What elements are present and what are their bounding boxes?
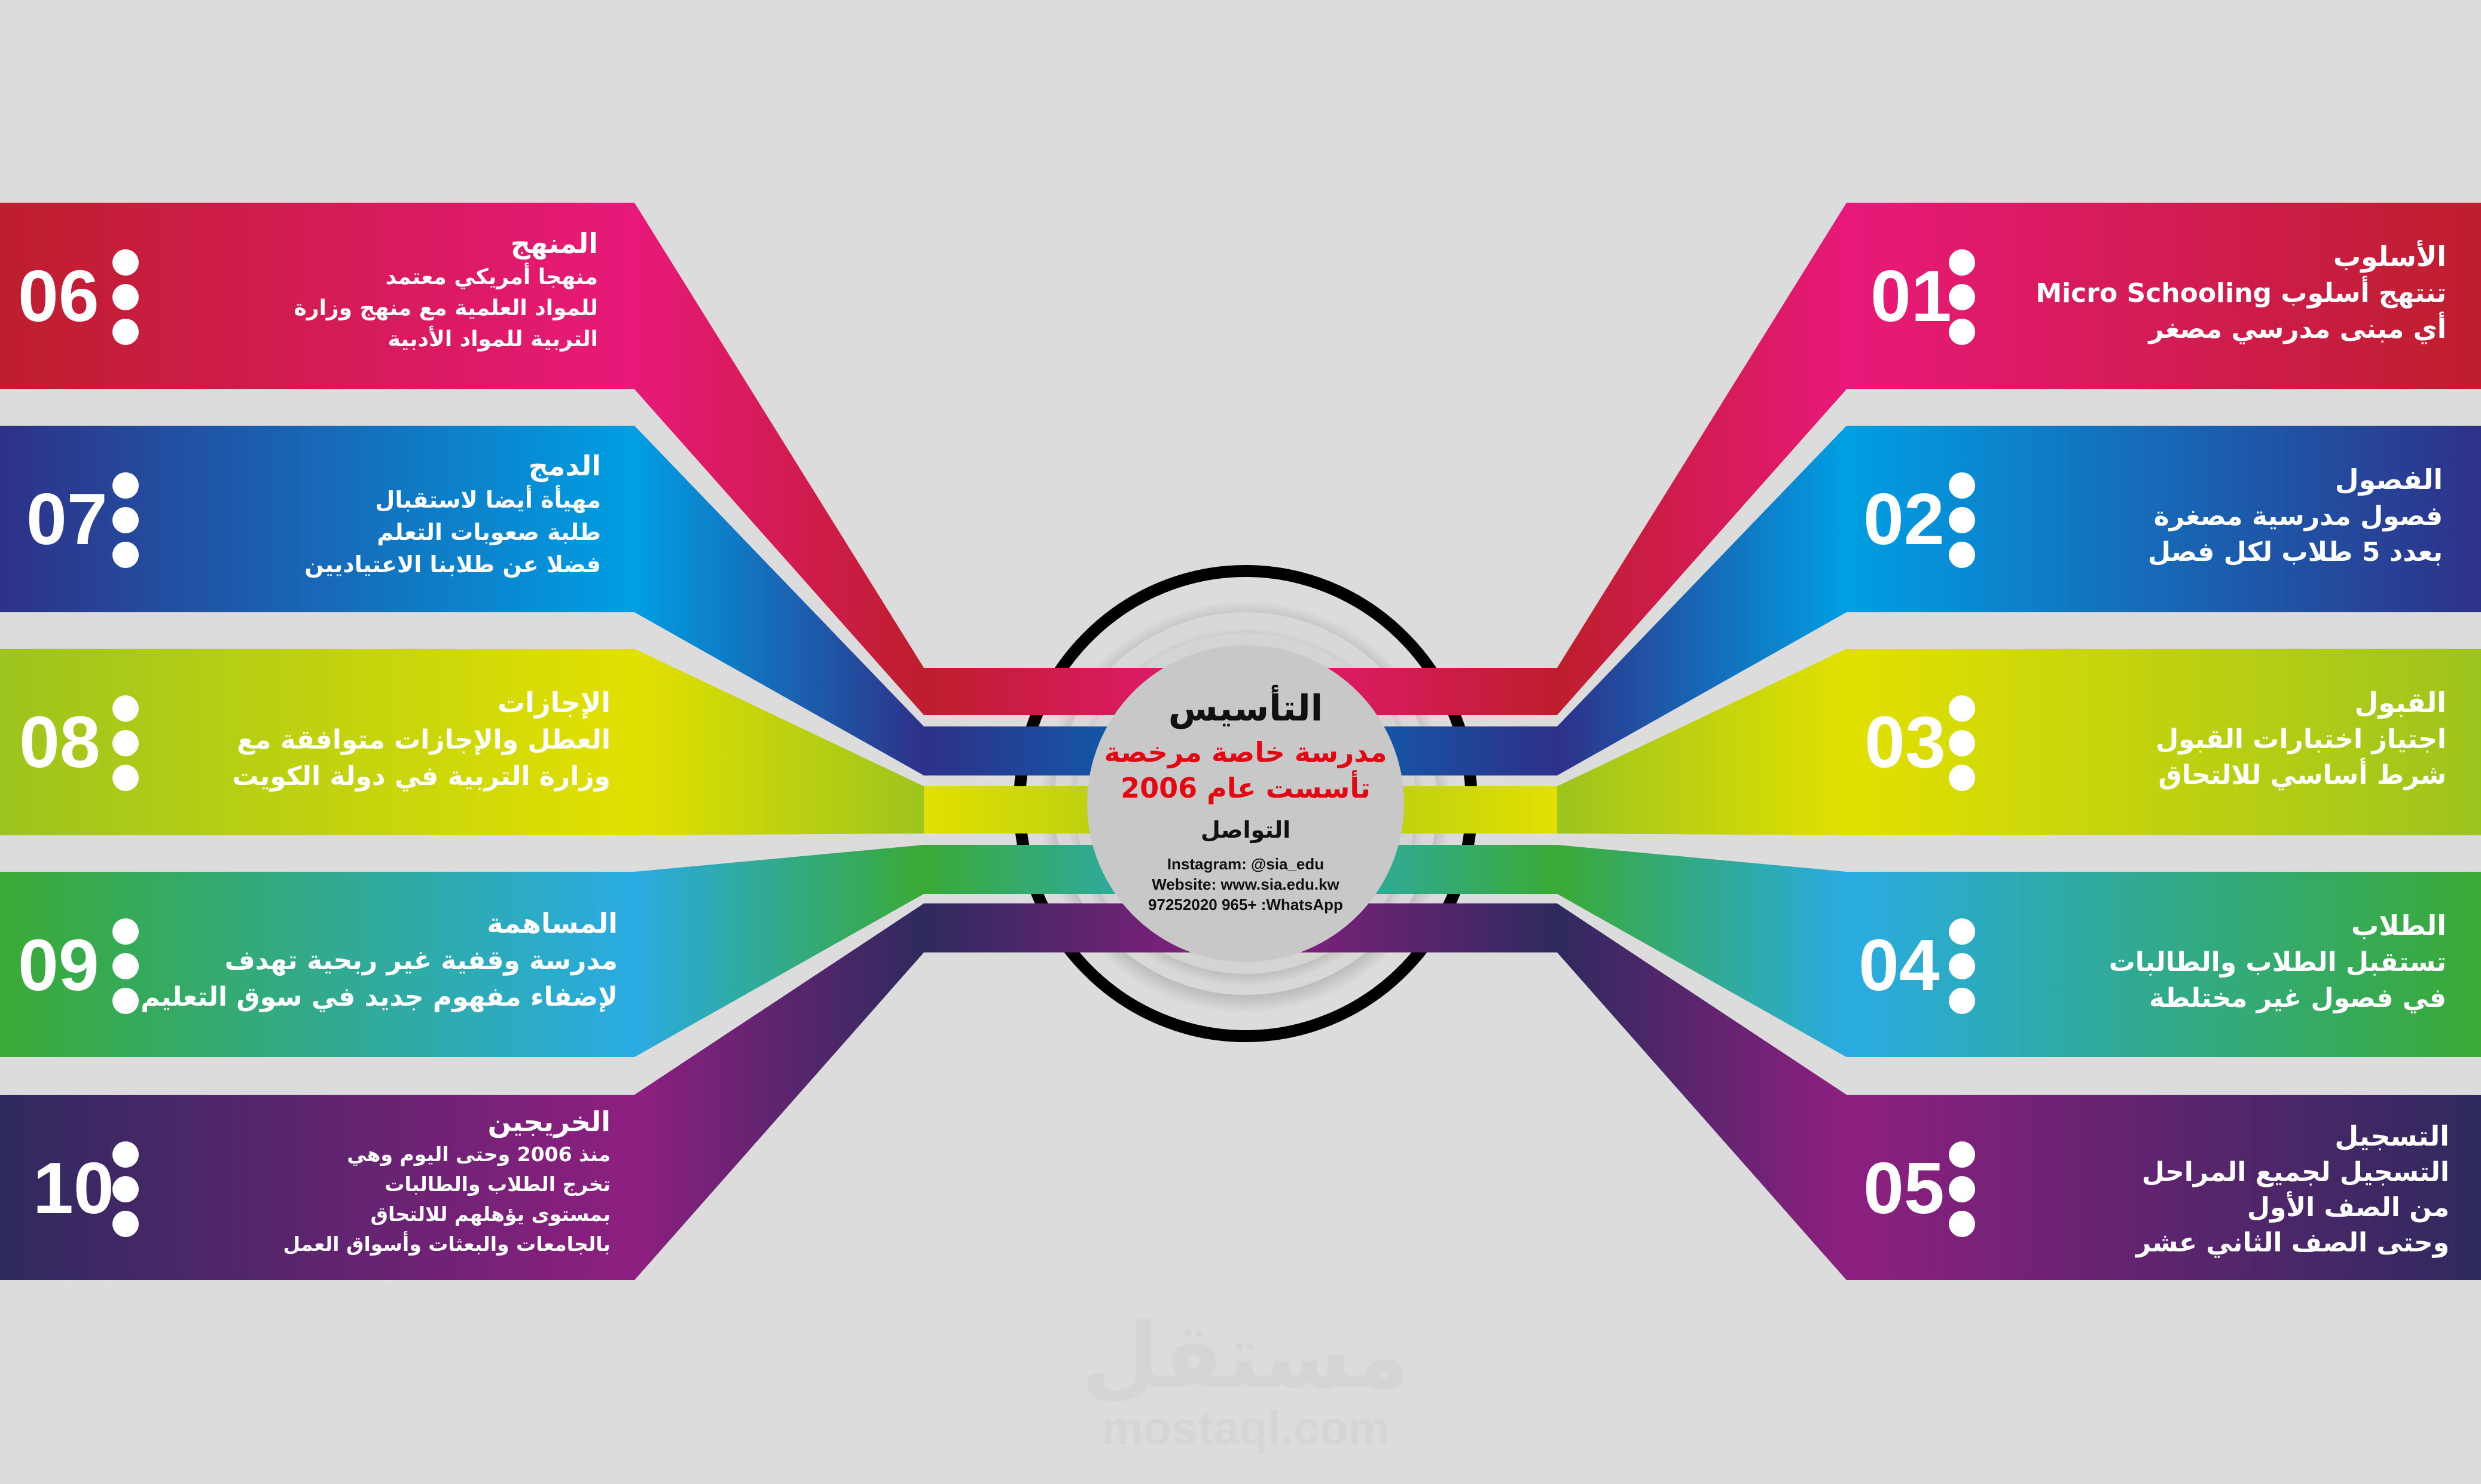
- item 05: [1863, 1120, 2449, 1258]
- item 10: بالجامعات والبعثات وأسواق العمل: [283, 1232, 611, 1256]
- item 05: وحتى الصف الثاني عشر: [2136, 1227, 2449, 1258]
- item 07: فضلا عن طلابنا الاعتياديين: [304, 551, 601, 578]
- item 03: اجتياز اختبارات القبول: [2156, 724, 2446, 755]
- item 09: المساهمة: [487, 907, 618, 939]
- item 07: 07: [26, 478, 108, 560]
- item 05: من الصف الأول: [2247, 1192, 2449, 1223]
- central bars: [924, 668, 1557, 952]
- item 09: 09: [18, 924, 99, 1006]
- item 04: الطلاب: [2351, 909, 2446, 942]
- item 10: الخريجين: [488, 1106, 611, 1138]
- item 08: وزارة التربية في دولة الكويت: [232, 761, 611, 792]
- item 09: لإضفاء مفهوم جديد في سوق التعليم: [141, 982, 618, 1012]
- centre disc: [1087, 645, 1404, 962]
- item 01: تنتهج أسلوب Micro Schooling: [2036, 278, 2446, 309]
- contact details: Website: www.sia.edu.kw: [1152, 875, 1339, 893]
- item 08: العطل والإجازات متوافقة مع: [237, 725, 611, 755]
- item 05: 05: [1863, 1147, 1945, 1229]
- contact details: Instagram: @sia_edu: [1167, 855, 1324, 873]
- item 01: [1870, 240, 2446, 345]
- contact heading: التواصل: [1201, 817, 1290, 843]
- item 06: [18, 227, 598, 352]
- right panels: [1847, 203, 2481, 1280]
- item 06: التربية للمواد الأدبية: [388, 327, 598, 352]
- item 07: مهيأة أيضا لاستقبال: [375, 487, 601, 513]
- item 10: [33, 1106, 611, 1256]
- item 10: تخرج الطلاب والطالبات: [384, 1172, 611, 1196]
- item 02: الفصول: [2335, 463, 2443, 496]
- item 07: [26, 450, 601, 578]
- left panels: [0, 203, 634, 1280]
- connectors right: [1557, 203, 1847, 1280]
- item 06: منهجا أمريكي معتمد: [386, 265, 598, 289]
- item 06: 06: [18, 255, 99, 337]
- item 02: بعدد 5 طلاب لكل فصل: [2148, 537, 2443, 567]
- item 05: التسجيل لجميع المراحل: [2142, 1157, 2449, 1187]
- watermark: [1082, 1305, 1409, 1454]
- item 01: 01: [1870, 255, 1952, 337]
- item 08: 08: [19, 701, 100, 783]
- item 06: للمواد العلمية مع منهج وزارة: [294, 296, 598, 320]
- item 04: في فصول غير مختلطة: [2149, 983, 2446, 1013]
- centre text: التأسيس: [1168, 688, 1323, 729]
- item 08: [19, 686, 611, 792]
- item 03: 03: [1864, 701, 1946, 783]
- item 10: بمستوى يؤهلهم للالتحاق: [370, 1202, 611, 1226]
- centre red text: [1104, 736, 1387, 805]
- connectors left: [634, 203, 924, 1280]
- item 07: الدمج: [529, 450, 601, 482]
- centre rings: [1020, 571, 1472, 1036]
- item 02: 02: [1863, 478, 1945, 560]
- item 02: [1863, 463, 2443, 568]
- item 01: أي مبنى مدرسي مصغر: [2149, 314, 2446, 344]
- item 08: الإجازات: [498, 686, 611, 719]
- item 06: المنهج: [511, 227, 598, 259]
- item 10: 10: [33, 1147, 114, 1229]
- item 09: [18, 907, 618, 1014]
- item 01: الأسلوب: [2333, 240, 2446, 273]
- item 04: تستقبل الطلاب والطالبات: [2109, 947, 2446, 978]
- item 03: شرط أساسي للالتحاق: [2158, 760, 2446, 790]
- item 09: مدرسة وقفية غير ربحية تهدف: [225, 945, 618, 976]
- item 02: فصول مدرسية مصغرة: [2154, 501, 2443, 532]
- watermark: mostaql.com: [1101, 1401, 1390, 1454]
- centre red text: مدرسة خاصة مرخصة: [1104, 736, 1387, 768]
- item 03: القبول: [2354, 686, 2446, 719]
- item 05: التسجيل: [2334, 1120, 2449, 1152]
- item 04: [1859, 909, 2446, 1014]
- centre red text: تأسست عام 2006: [1121, 772, 1371, 804]
- item 03: [1864, 686, 2446, 791]
- item 04: 04: [1859, 924, 1940, 1006]
- item 10: منذ 2006 وحتى اليوم وهي: [347, 1143, 611, 1166]
- contact details: 97252020 965+ :WhatsApp: [1148, 896, 1343, 914]
- contact details: [1148, 855, 1343, 914]
- watermark: مستقل: [1082, 1305, 1409, 1409]
- item 07: طلبة صعوبات التعلم: [377, 519, 601, 545]
